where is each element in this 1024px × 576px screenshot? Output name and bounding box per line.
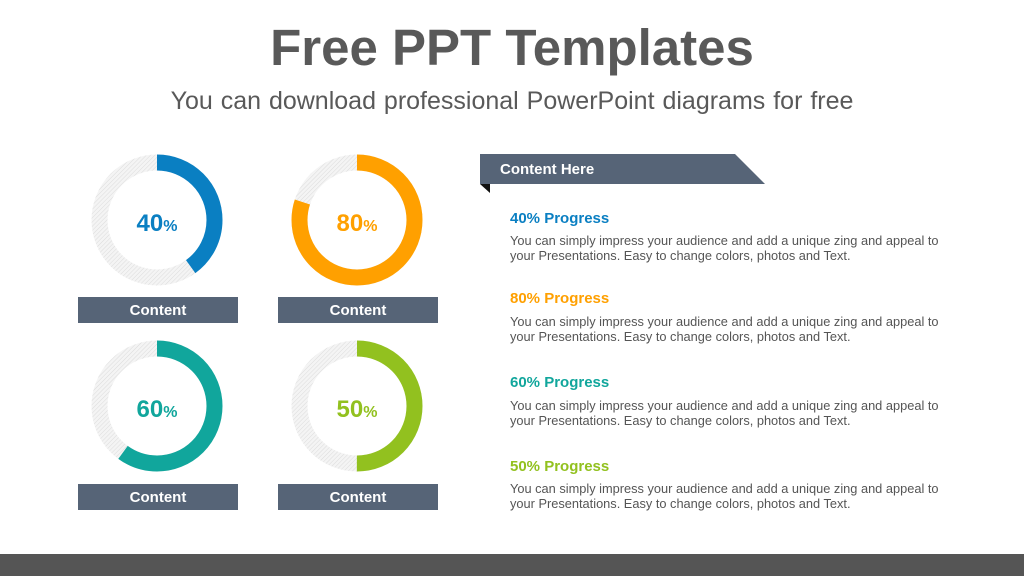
item 1: 40% Progress — [510, 210, 609, 227]
donut: 80%: 80% — [337, 210, 377, 237]
item 3: 60% Progress — [510, 374, 609, 391]
label band 2 — [278, 297, 438, 323]
label band 3 — [78, 484, 238, 510]
label band 1: Content — [130, 302, 186, 319]
item 4: 50% Progress — [510, 458, 609, 475]
label band 1 — [78, 297, 238, 323]
text: You can simply impress your audience and add a unique zing and appeal to your Presentations. Easy to change colors, photos and Text. — [510, 314, 939, 344]
donut: 40%: 40% — [137, 210, 177, 237]
donut: 50% — [300, 348, 414, 464]
text: You can simply impress your audience and add a unique zing and appeal to your Presentations. Easy to change colors, photos and Text. — [510, 233, 939, 263]
text: You can simply impress your audience and add a unique zing and appeal to your Presentations. Easy to change colors, photos and Text. — [510, 481, 939, 511]
label band 4: Content — [330, 489, 386, 506]
donut: 60% — [100, 348, 214, 464]
ribbon header: Content Here — [500, 161, 594, 178]
label band 2: Content — [330, 302, 386, 319]
label band 3: Content — [130, 489, 186, 506]
donut: 40% — [100, 162, 214, 278]
label band 4 — [278, 484, 438, 510]
donut charts — [92, 154, 422, 472]
subtitle: You can download professional PowerPoint diagrams for free — [171, 87, 853, 115]
footer bar — [0, 554, 1024, 576]
text: You can simply impress your audience and add a unique zing and appeal to your Presentations. Easy to change colors, photos and Text. — [510, 398, 939, 428]
item 2: 80% Progress — [510, 290, 609, 307]
donut: 80% — [300, 162, 414, 278]
donut: 60%: 60% — [137, 396, 177, 423]
donut: 50%: 50% — [337, 396, 377, 423]
ribbon header — [480, 154, 765, 193]
title: Free PPT Templates — [270, 19, 754, 76]
